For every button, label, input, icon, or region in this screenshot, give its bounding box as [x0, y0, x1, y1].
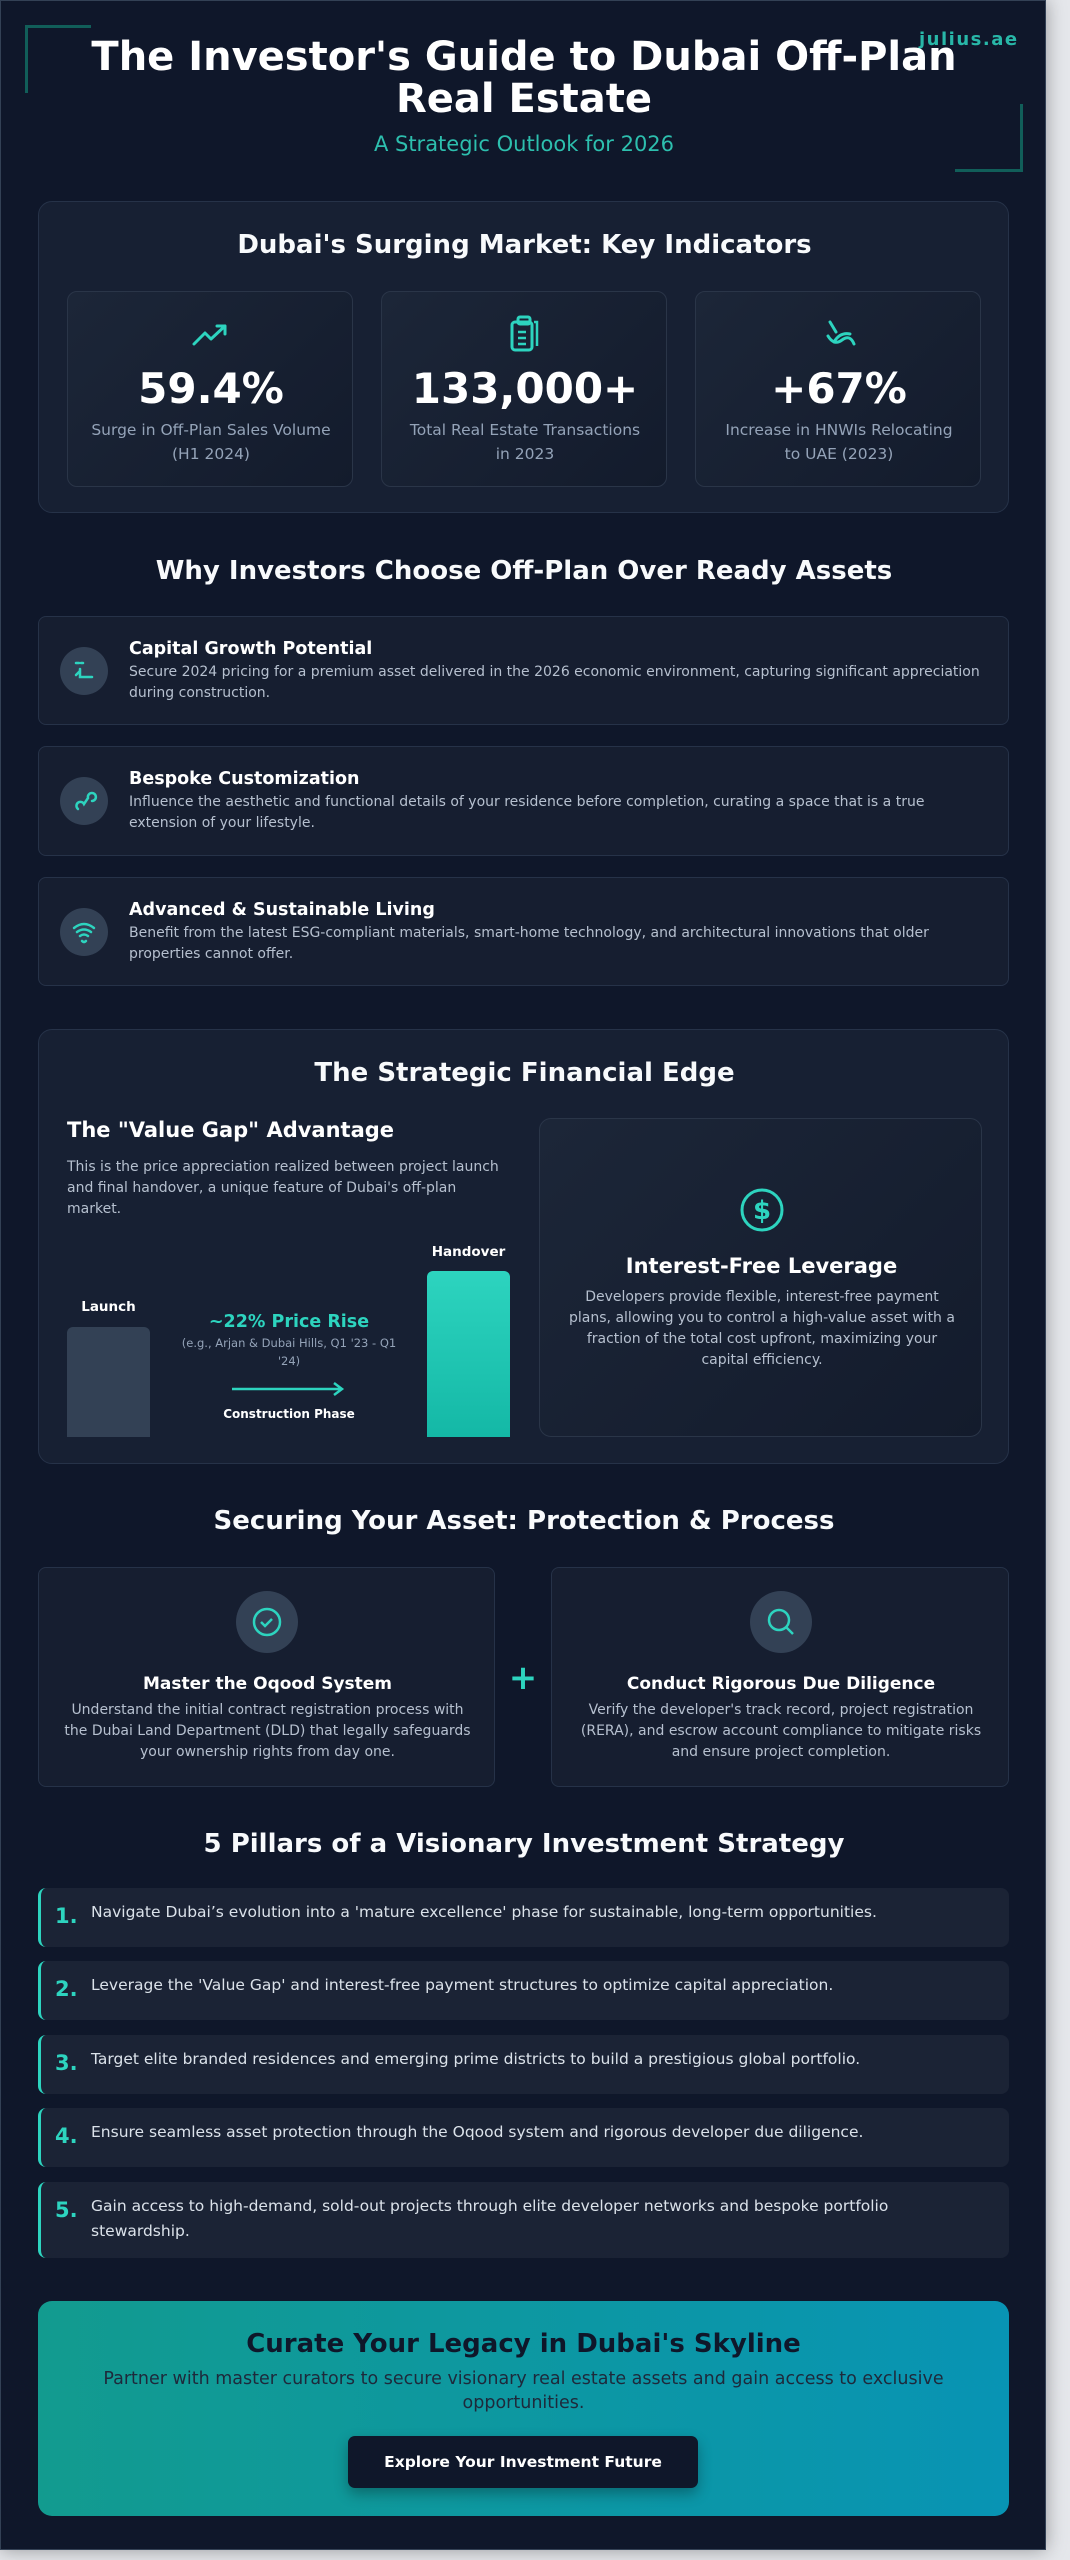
- brand: julius.ae: julius.ae: [919, 29, 1019, 50]
- title: [91, 34, 957, 122]
- card: oqood: [38, 1567, 495, 1787]
- card: interest-free leverage: [539, 1118, 982, 1437]
- callout: price rise: [182, 1312, 396, 1368]
- card: due diligence: [551, 1567, 1009, 1787]
- stat card 3: [695, 291, 981, 487]
- icon: growth: [60, 647, 108, 695]
- label: launch: Launch: [81, 1299, 136, 1315]
- CTA button: Explore Your Investment Future: [384, 2453, 662, 2471]
- stat label: [410, 421, 640, 463]
- heading: why off-plan: Why Investors Choose Off-Plan Over Ready Assets: [156, 556, 892, 586]
- pillar 4: 4.: [55, 2124, 78, 2148]
- stat value: 59.4%: [138, 364, 284, 413]
- CTA text: Partner with master curators to secure visionary real estate assets and gain access to exclusive opportunities.: [103, 2369, 944, 2413]
- title: Master the Oqood System: [143, 1674, 392, 1694]
- heading: financial edge: The Strategic Financial Edge: [314, 1058, 735, 1088]
- callout: price rise: (e.g., Arjan & Dubai Hills, Q1 '23 - Q1 '24): [182, 1336, 396, 1368]
- pillar 3: [38, 2035, 1009, 2094]
- stat label: in 2023: [496, 445, 554, 463]
- benefit card: customization: [38, 746, 1009, 856]
- pillar 1: [38, 1888, 1009, 1947]
- subheading: value gap: The "Value Gap" Advantage: [67, 1118, 394, 1142]
- stat value: +67%: [771, 364, 907, 413]
- stat label: Increase in HNWIs Relocating: [725, 421, 953, 439]
- subtitle: A Strategic Outlook for 2026: [374, 132, 674, 156]
- pillar 4: Ensure seamless asset protection through the Oqood system and rigorous developer due diligence.: [91, 2123, 863, 2141]
- bar: handover: [427, 1271, 510, 1437]
- heading: 5 pillars: 5 Pillars of a Visionary Investment Strategy: [204, 1829, 844, 1859]
- pillar 4: [38, 2108, 1009, 2167]
- arrow: construction: [232, 1382, 344, 1396]
- stat label: to UAE (2023): [785, 445, 893, 463]
- description: Developers provide flexible, interest-free payment plans, allowing you to control a high-value asset with a fraction of the total cost upfront, maximizing your capital efficiency.: [569, 1289, 955, 1368]
- pillar 5: [38, 2182, 1009, 2258]
- description: Understand the initial contract registration process with the Dubai Land Department (DLD) that legally safeguards your ownership rights from day one.: [64, 1702, 471, 1760]
- pillar 3: 3.: [55, 2051, 78, 2075]
- pillar 3: Target elite branded residences and emerging prime districts to build a prestigious global portfolio.: [91, 2050, 860, 2068]
- panel: key indicators: [38, 201, 1009, 513]
- pillar 2: Leverage the 'Value Gap' and interest-free payment structures to optimize capital appreciation.: [91, 1976, 833, 1994]
- icon: dollar: $: [753, 1196, 771, 1226]
- title: Interest-Free Leverage: [626, 1254, 897, 1278]
- icon: plus: +: [509, 1658, 537, 1698]
- heading: securing asset: Securing Your Asset: Protection & Process: [214, 1506, 834, 1536]
- title: Capital Growth Potential: [129, 639, 372, 659]
- description: Verify the developer's track record, project registration (RERA), and escrow account compliance to mitigate risks and ensure project completion.: [581, 1702, 981, 1760]
- panel: call to action: [38, 2301, 1009, 2516]
- stat label: Surge in Off-Plan Sales Volume: [91, 421, 331, 439]
- stat card 1: [67, 291, 353, 487]
- stat card 2: [381, 291, 667, 487]
- pillar 5: Gain access to high-demand, sold-out projects through elite developer networks and bespoke portfolio stewardship.: [91, 2197, 888, 2240]
- title: Bespoke Customization: [129, 769, 359, 789]
- stat value: 133,000+: [412, 364, 638, 413]
- CTA button: [348, 2436, 698, 2488]
- stat label: [91, 421, 331, 463]
- pillar 2: 2.: [55, 1977, 78, 2001]
- benefit card: sustainable living: [38, 877, 1009, 986]
- benefit card: capital growth: [38, 616, 1009, 725]
- title: The Investor's Guide to Dubai Off-Plan: [91, 34, 957, 80]
- description: Influence the aesthetic and functional details of your residence before completion, curating a space that is a true extension of your lifestyle.: [129, 794, 924, 831]
- icon: wifi: [60, 908, 108, 956]
- stat label: (H1 2024): [172, 445, 250, 463]
- description: Secure 2024 pricing for a premium asset delivered in the 2026 economic environment, capturing significant appreciation during construction.: [129, 664, 980, 701]
- bar chart: value gap: [67, 1244, 510, 1437]
- icon: clipboard: [510, 316, 538, 352]
- stat label: [725, 421, 953, 463]
- title: Advanced & Sustainable Living: [129, 900, 435, 920]
- icon: plane: [826, 320, 856, 346]
- label: handover: Handover: [432, 1244, 505, 1260]
- CTA title: Curate Your Legacy in Dubai's Skyline: [246, 2329, 801, 2359]
- title: Real Estate: [396, 76, 652, 122]
- bar: launch: [67, 1327, 150, 1437]
- heading: key indicators: Dubai's Surging Market: Key Indicators: [237, 230, 812, 260]
- corner bracket top-left: [25, 25, 91, 93]
- pillar 1: Navigate Dubai’s evolution into a 'mature excellence' phase for sustainable, long-term opportunities.: [91, 1903, 877, 1921]
- description: Benefit from the latest ESG-compliant materials, smart-home technology, and architectural innovations that older properties cannot offer.: [129, 925, 929, 962]
- callout: price rise: ~22% Price Rise: [209, 1312, 369, 1332]
- icon: dollar: [740, 1188, 784, 1232]
- icon: trend up: [192, 324, 227, 346]
- pillar 5: 5.: [55, 2198, 78, 2222]
- label: construction phase: Construction Phase: [223, 1407, 355, 1421]
- pillar 1: 1.: [55, 1904, 78, 1928]
- icon: check: [236, 1591, 298, 1653]
- corner bracket bottom-right: [955, 104, 1023, 172]
- pillar 2: [38, 1961, 1009, 2020]
- panel: financial edge: [38, 1029, 1009, 1464]
- paragraph: value gap: This is the price appreciation realized between project launch and final handover, a unique feature of Dubai's off-plan market.: [67, 1159, 499, 1217]
- title: Conduct Rigorous Due Diligence: [627, 1674, 935, 1694]
- icon: search: [750, 1591, 812, 1653]
- icon: link: [60, 777, 108, 825]
- stat label: Total Real Estate Transactions: [410, 421, 640, 439]
